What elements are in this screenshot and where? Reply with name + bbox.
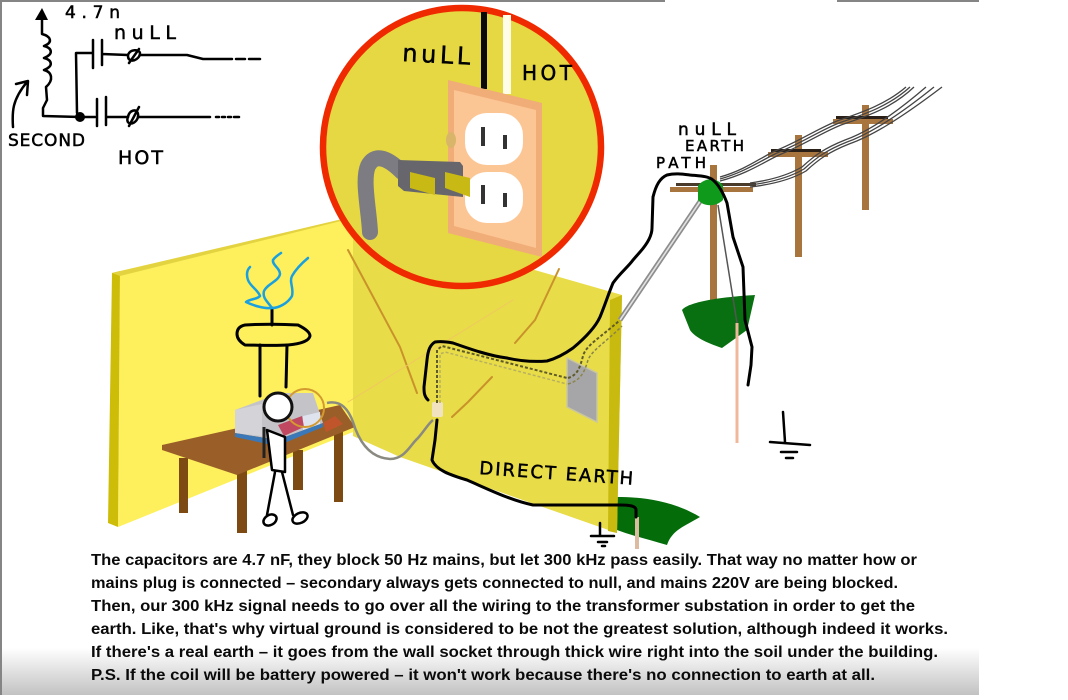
label: 4.7n: 4.7n xyxy=(65,3,120,23)
box front light face xyxy=(235,404,262,436)
overhead wires xyxy=(720,87,942,187)
explanation text block xyxy=(91,552,948,684)
red table patch xyxy=(323,416,343,432)
pole 2 xyxy=(768,135,828,257)
pole earth rod xyxy=(736,323,738,443)
electrical panel box xyxy=(567,358,597,422)
right wall xyxy=(353,218,622,533)
power cord xyxy=(327,402,433,459)
coil sides xyxy=(260,345,287,396)
plug body xyxy=(398,160,463,197)
label: second: SECOND xyxy=(8,131,85,151)
magnified socket circle xyxy=(323,8,601,286)
direct earth line xyxy=(432,420,636,517)
back of body xyxy=(262,427,266,458)
explanation text block: Then, our 300 kHz signal needs to go over all the wiring to the transformer substation in order to get the xyxy=(91,598,915,615)
coil with arrow xyxy=(35,8,80,117)
earth symbol near pole xyxy=(770,412,810,458)
curved arrow xyxy=(13,81,28,127)
earth symbol near building xyxy=(591,523,614,546)
pole transformer xyxy=(698,179,723,205)
small tan spot xyxy=(446,132,456,148)
right wall edge xyxy=(608,295,622,533)
legs xyxy=(267,472,293,515)
lower receptacle xyxy=(465,172,523,223)
explanation text block: The capacitors are 4.7 nF, they block 50 Hz mains, but let 300 kHz pass easily. That way no matter how or xyxy=(91,552,917,569)
coil drawing xyxy=(237,253,310,396)
label: null: nuLL xyxy=(402,39,472,71)
null earth path line xyxy=(424,174,752,400)
lower capacitor line xyxy=(80,97,239,126)
socket plate xyxy=(448,80,542,257)
plug blade 2 xyxy=(445,172,470,197)
table top xyxy=(162,405,355,475)
orange ring xyxy=(286,389,324,427)
brown zoom lines xyxy=(348,250,559,417)
lower terminal xyxy=(127,107,139,126)
stem xyxy=(270,308,274,325)
plug cable xyxy=(366,158,402,232)
panel on box xyxy=(303,412,320,430)
plug blade 1 xyxy=(410,172,435,195)
left wall top xyxy=(112,218,353,276)
red part xyxy=(278,416,304,436)
body xyxy=(267,430,285,472)
building earth rod xyxy=(635,517,639,549)
label: null earth path xyxy=(656,120,744,172)
label: hot: HOT xyxy=(118,147,163,169)
circuit schematic xyxy=(8,3,260,169)
label: direct earth: DIRECT EARTH xyxy=(479,458,634,490)
service drop wires xyxy=(620,197,703,320)
label: null earth path: PATH xyxy=(656,154,706,172)
upper capacitor line xyxy=(76,40,260,113)
base stripe xyxy=(235,423,323,446)
pole 3 xyxy=(833,105,893,210)
feet xyxy=(261,510,309,528)
table xyxy=(162,405,355,533)
wall wiring dashed xyxy=(437,320,622,403)
explanation text block: P.S. If the coil will be battery powered – it won't work because there's no connection to earth at all. xyxy=(91,667,875,684)
room walls xyxy=(108,218,622,533)
pole 1 xyxy=(670,165,756,320)
white wire xyxy=(503,15,511,94)
explanation text block: earth. Like, that's why virtual ground is considered to be not the greatest solution, although indeed it works. xyxy=(91,621,948,638)
label: null: nuLL xyxy=(114,22,176,44)
topload xyxy=(237,324,310,345)
base box xyxy=(235,393,323,440)
label: hot: HOT xyxy=(522,61,573,85)
explanation text block: mains plug is connected – secondary always gets connected to null, and mains 220V are being blocked. xyxy=(91,575,898,592)
ground patch by the house xyxy=(617,497,700,545)
ground patch by pole xyxy=(682,295,755,348)
explanation text block: If there's a real earth – it goes from the wall socket through thick wire right into the soil under the building. xyxy=(91,644,938,661)
junction dot xyxy=(75,112,85,122)
head xyxy=(264,393,292,421)
utility poles xyxy=(670,105,893,320)
left wall xyxy=(118,218,353,527)
stick figure xyxy=(261,393,309,528)
circle xyxy=(323,8,601,286)
left wall edge xyxy=(108,271,120,527)
black wire xyxy=(481,12,487,89)
upper receptacle xyxy=(465,113,523,165)
label: null earth path: nuLL xyxy=(678,120,737,140)
table legs xyxy=(179,430,343,533)
tesla coil unit on table xyxy=(235,389,343,446)
pole earth wire xyxy=(718,205,737,323)
upper terminal xyxy=(128,49,140,63)
sparks xyxy=(246,253,308,308)
label: null earth path: EARTH xyxy=(685,137,744,155)
wall socket small xyxy=(432,402,443,417)
